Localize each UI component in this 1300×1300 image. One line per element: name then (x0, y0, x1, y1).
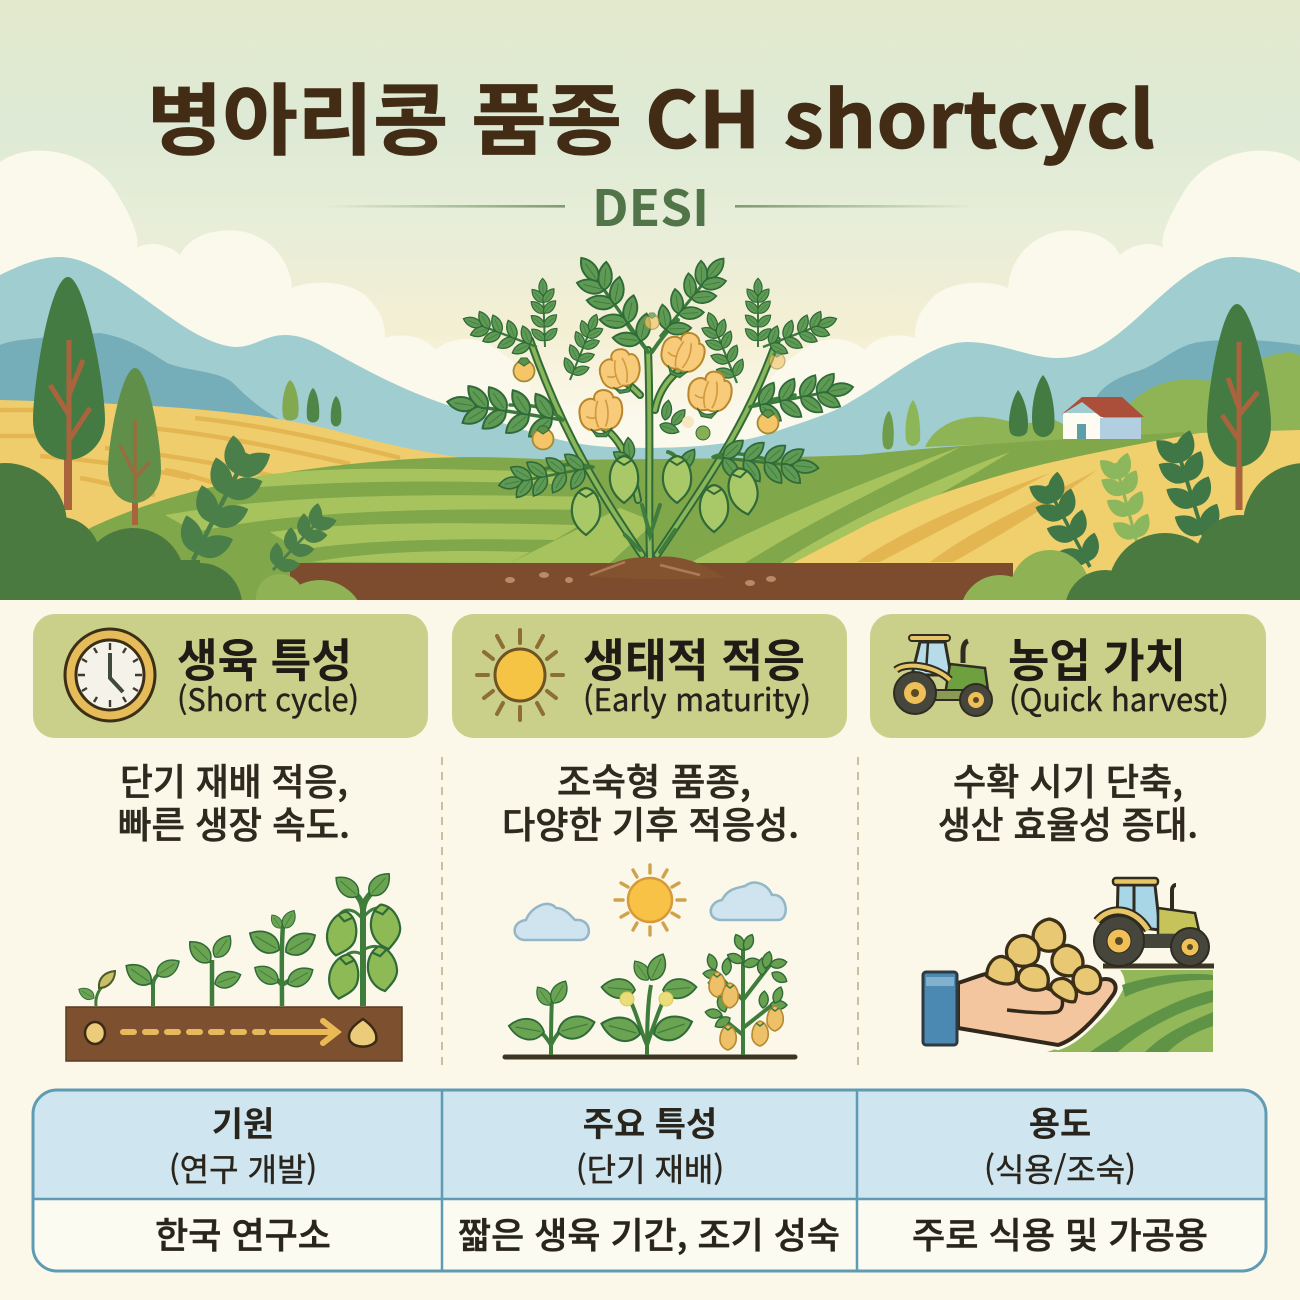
table column: uses: 용도 (1029, 1097, 1091, 1146)
icon: clock (65, 629, 155, 721)
table column: uses: (식용/조숙) (984, 1145, 1136, 1191)
ground line (505, 1054, 795, 1060)
illustration: growth stages over soil (66, 868, 404, 1061)
header: growth (33, 614, 428, 738)
plant flowers (579, 326, 735, 437)
description: ecology (502, 752, 799, 849)
title: 병아리콩 품종 CH shortcycl (147, 59, 1155, 171)
mountains (0, 257, 1300, 480)
fruiting plant (703, 933, 789, 1055)
panel: growth characteristics (33, 614, 428, 1061)
farmhouse (1061, 397, 1144, 439)
header: value (870, 614, 1266, 738)
plant stems (510, 320, 795, 557)
description: ecology: 조숙형 품종, (557, 752, 751, 806)
header: ecology: 생태적 적응 (583, 625, 805, 691)
left yellow field (0, 400, 460, 530)
plant pods (572, 456, 762, 535)
table column: origin: (연구 개발) (169, 1145, 317, 1191)
distant trees (282, 375, 1055, 450)
cloud left (515, 904, 589, 940)
table column: main traits: 주요 특성 (583, 1097, 717, 1146)
summary table (33, 1090, 1266, 1271)
table column: uses: 주로 식용 및 가공용 (912, 1207, 1208, 1259)
divider: left dashed (441, 757, 443, 1065)
table column: origin (155, 1097, 331, 1259)
description: ecology: 다양한 기후 적응성. (502, 795, 799, 849)
table column: origin: 기원 (212, 1097, 274, 1146)
table column: main traits: 짧은 생육 기간, 조기 성숙 (458, 1207, 840, 1259)
main chickpea plant illustration (443, 243, 858, 586)
header: ecology: (Early maturity) (583, 675, 811, 720)
clouds (0, 150, 1300, 392)
table column: uses (912, 1097, 1208, 1259)
description: value: 수확 시기 단축, (953, 752, 1183, 806)
description: growth: 단기 재배 적응, (120, 752, 348, 806)
panel: agricultural value (870, 614, 1266, 1052)
foreground bushes (0, 463, 1300, 600)
description: value (938, 752, 1198, 849)
plant stages (76, 868, 404, 1006)
description: growth (118, 752, 350, 849)
growth arrow (123, 1021, 337, 1043)
right hills (1115, 352, 1300, 440)
table column: main traits (458, 1097, 840, 1259)
header: value: (Quick harvest) (1009, 675, 1229, 720)
small plant (507, 978, 597, 1055)
subtitle: DESI: DESI (592, 169, 709, 241)
field (1047, 970, 1213, 1052)
sleeve cuff (923, 972, 957, 1045)
illustration: harvest in hand with tractor (923, 878, 1214, 1052)
soil strip (290, 563, 1013, 600)
mature chickpea (349, 1019, 376, 1047)
soil mound (505, 556, 776, 586)
divider: right dashed (857, 757, 859, 1065)
description: growth: 빠른 생장 속도. (118, 795, 350, 849)
table column: origin: 한국 연구소 (155, 1207, 331, 1259)
header: value: 농업 가치 (1008, 625, 1186, 691)
sky (0, 0, 1300, 380)
tractor (1094, 878, 1214, 966)
header: growth: 생육 특성 (177, 625, 352, 691)
illustration: plants under sun and clouds (505, 865, 795, 1057)
icon: tractor (894, 635, 992, 716)
sun (615, 865, 685, 935)
table header row (33, 1090, 1266, 1199)
left trees (33, 277, 161, 525)
panel: ecological adaptation (452, 614, 847, 1057)
right tree (1207, 304, 1271, 510)
foreground fronds (163, 422, 1233, 584)
soil bar (66, 1007, 402, 1061)
right yellow field (793, 430, 1300, 575)
header: growth: (Short cycle) (177, 675, 359, 720)
chickpeas (987, 919, 1101, 1002)
hand (958, 973, 1116, 1045)
plant leaves (443, 243, 858, 506)
seed (85, 1022, 105, 1044)
hero landscape (0, 0, 1300, 600)
flowering plant (599, 951, 697, 1055)
description: value: 생산 효율성 증대. (938, 795, 1198, 849)
header: ecology (452, 614, 847, 738)
cloud right (711, 883, 786, 920)
green fields (0, 432, 1185, 600)
table column: main traits: (단기 재배) (576, 1145, 724, 1191)
plant buds (514, 313, 785, 450)
icon: sun (477, 630, 563, 720)
